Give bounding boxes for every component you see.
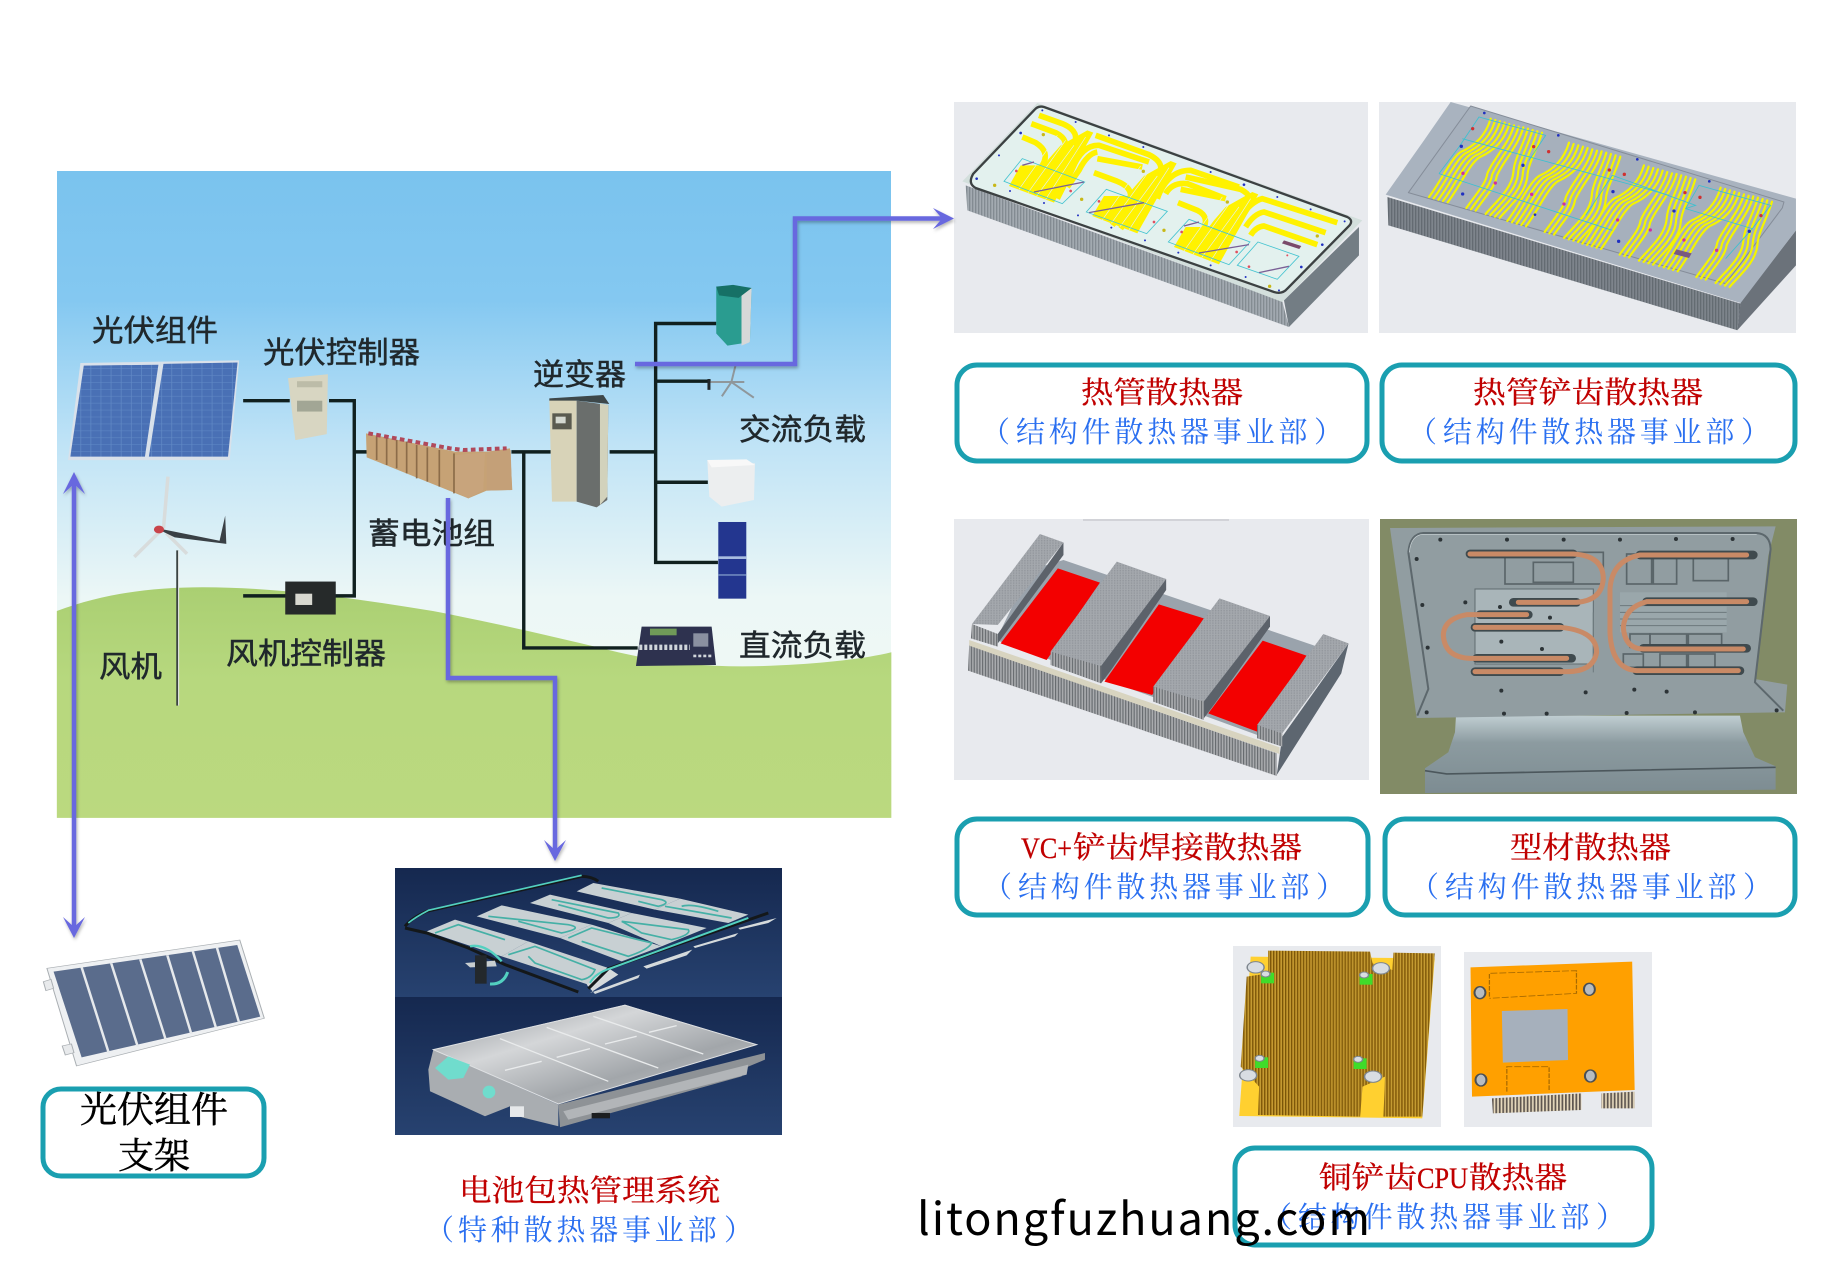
image: heat pipe radiator	[954, 102, 1368, 333]
coolant frame	[405, 875, 768, 992]
icon: wind controller	[285, 582, 336, 615]
sky background	[57, 171, 891, 818]
icon: inverter cabinet	[549, 395, 609, 507]
label box: extruded radiator: 结构件散热器事业部	[1445, 871, 1740, 904]
arrow: battery bank to battery thermal system	[448, 498, 566, 861]
label: battery pack title: 电池包热管理系统	[459, 1175, 720, 1208]
label: battery pack division: ）	[724, 1215, 757, 1247]
label box: heat pipe radiator: ）	[1314, 417, 1347, 449]
label box: copper CPU radiator: CPU	[1417, 1162, 1468, 1195]
label box: heat pipe radiator	[957, 365, 1367, 461]
label box: copper CPU radiator: 散热器	[1469, 1162, 1567, 1195]
label box: extruded radiator	[1385, 819, 1795, 915]
label box: heat pipe skived-fin radiator: 结构件散热器事业部	[1443, 416, 1738, 449]
label: PV controller: 光伏控制器	[263, 337, 420, 370]
label box: VC radiator: 铲齿焊接散热器	[1073, 832, 1302, 865]
icon: wind turbine	[134, 477, 226, 706]
label box: heat pipe skived-fin radiator: 热管铲齿散热器	[1473, 377, 1703, 410]
image: extruded profile radiator photo	[1380, 519, 1797, 794]
label box: extruded radiator: ）	[1743, 872, 1776, 904]
label: wind controller: 风机控制器	[226, 638, 386, 671]
label box: VC radiator: （	[983, 872, 1016, 904]
label: PV modules: 光伏组件	[92, 315, 218, 348]
icon: AC load, teal device	[716, 285, 752, 346]
label: DC load: 直流负载	[739, 630, 866, 663]
label box: heat pipe skived-fin radiator	[1382, 365, 1795, 461]
label box: copper CPU radiator	[1235, 1148, 1652, 1245]
icon: AC load, fan	[709, 364, 754, 398]
green hill	[57, 587, 891, 818]
icon: AC load, freezer	[707, 459, 755, 507]
panel: solar wind power system diagram	[57, 171, 891, 818]
label box: PV bracket	[43, 1089, 264, 1176]
label box: copper CPU radiator: 结构件散热器事业部	[1298, 1201, 1593, 1234]
label box: heat pipe skived-fin radiator: （	[1408, 417, 1441, 449]
label: inverter: 逆变器	[533, 359, 626, 392]
icon: solar panels	[68, 360, 239, 460]
icon: AC load, blue panel	[718, 522, 746, 599]
label: wind turbine: 风机	[99, 651, 162, 684]
label box: extruded radiator: 型材散热器	[1510, 832, 1671, 865]
battery pack	[428, 1050, 558, 1126]
arrow: double-headed, PV modules to bracket	[63, 472, 85, 938]
image: copper skived CPU radiator, top	[1233, 946, 1441, 1127]
icon: battery bank	[366, 433, 512, 498]
label box: PV bracket: 光伏组件	[80, 1090, 228, 1130]
label box: heat pipe skived-fin radiator: ）	[1741, 417, 1774, 449]
arrow: inverter to heat pipe radiators	[635, 208, 954, 364]
cooling plate strips	[427, 883, 748, 985]
label box: copper CPU radiator: ）	[1596, 1202, 1629, 1234]
label box: VC radiator: VC+	[1021, 832, 1072, 865]
image: VC skived-fin welded radiator	[954, 519, 1369, 780]
label box: heat pipe radiator: 结构件散热器事业部	[1016, 416, 1311, 449]
label box: extruded radiator: （	[1410, 872, 1443, 904]
icon: PV controller	[288, 374, 328, 440]
image: PV module bracket	[43, 940, 264, 1066]
label: battery pack division: （	[425, 1215, 458, 1247]
image: copper skived CPU radiator, underside	[1464, 952, 1652, 1127]
label box: PV bracket: 支架	[118, 1136, 190, 1176]
label box: copper CPU radiator: （	[1263, 1202, 1296, 1234]
label: AC load: 交流负载	[739, 414, 866, 447]
wiring lines	[243, 324, 718, 648]
label box: copper CPU radiator: 铜铲齿	[1319, 1162, 1417, 1195]
label: battery pack division: 特种散热器事业部	[458, 1214, 720, 1247]
watermark: litongfuzhuang.com	[917, 1183, 1370, 1248]
label box: heat pipe radiator: 热管散热器	[1081, 377, 1243, 410]
image: battery pack thermal management	[395, 868, 782, 1135]
icon: DC load, mixer	[636, 627, 716, 666]
label box: heat pipe radiator: （	[981, 417, 1014, 449]
image: heat pipe skived-fin radiator	[1379, 102, 1796, 333]
label: battery bank: 蓄电池组	[368, 518, 495, 551]
label box: VC radiator: ）	[1316, 872, 1349, 904]
label box: VC radiator: 结构件散热器事业部	[1018, 871, 1313, 904]
label box: VC radiator	[957, 819, 1368, 915]
